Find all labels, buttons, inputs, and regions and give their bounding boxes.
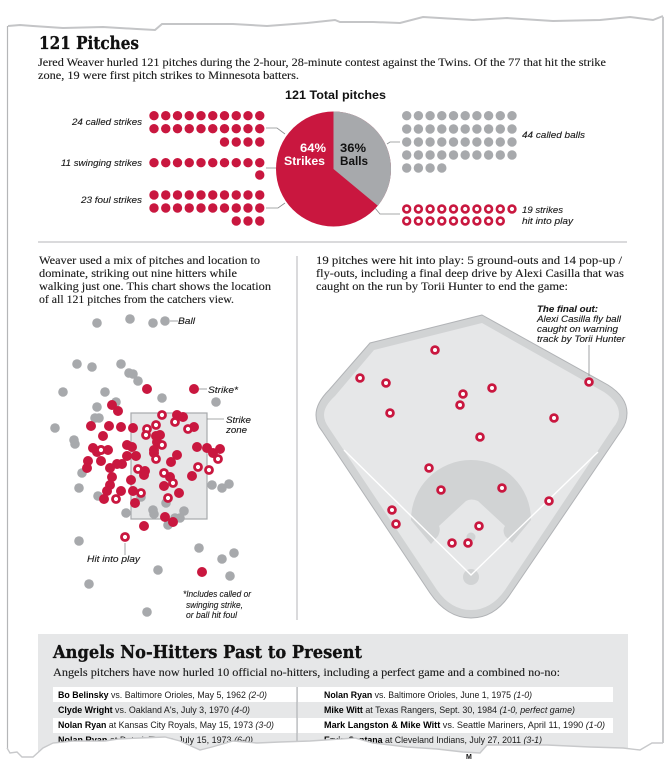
left paragraph: Weaver used a mix of pitches and location to	[39, 253, 260, 267]
no-hitter list: right column: Mike Witt at Texas Rangers, Sept. 30, 1984 (1-0, perfect game)	[324, 704, 575, 715]
strike zone box	[131, 413, 207, 519]
pitch category labels: 44 called balls	[522, 129, 585, 140]
no-hitter list: right column: Ervin Santana at Cleveland Indians, July 27, 2011 (3-1)	[324, 734, 542, 745]
scatter annotations: *Includes called or	[183, 588, 252, 599]
scatter annotations	[87, 315, 252, 620]
panel intro: Angels pitchers have now hurled 10 official no-hitters, including a perfect game and a combined no-no:	[53, 665, 560, 679]
pitch category labels: 11 swinging strikes	[61, 157, 142, 168]
baseball field	[316, 315, 627, 618]
no-hitter list: right column	[324, 689, 605, 745]
intro text	[38, 55, 606, 82]
pie chart: strikes vs balls: Balls	[340, 154, 368, 168]
final out callout	[536, 303, 626, 376]
left paragraph: walking just one. This chart shows the location	[39, 279, 271, 293]
scatter annotations: Ball	[178, 315, 196, 326]
no-hitter list: left column: Nolan Ryan at Kansas City Royals, May 15, 1973 (3-0)	[58, 719, 274, 730]
scatter annotations: Hit into play	[87, 553, 141, 564]
pitch category labels: 19 strikes	[522, 204, 563, 215]
scatter annotations: zone	[225, 424, 247, 435]
pitch category labels: hit into play	[522, 215, 574, 226]
no-hitter list: right column: Nolan Ryan vs. Baltimore Orioles, June 1, 1975 (1-0)	[324, 689, 532, 700]
title: 121 Pitches: 121 Pitches	[39, 33, 139, 54]
table rows	[53, 687, 613, 733]
dots: 11 swinging strikes	[149, 158, 264, 180]
pie connector lines	[266, 128, 400, 214]
pitch category labels: 24 called strikes	[71, 116, 142, 127]
torn fragment letter: M	[466, 754, 472, 761]
pitch category labels	[61, 116, 585, 226]
right paragraph	[316, 253, 624, 293]
scatter: balls	[50, 314, 239, 617]
scatter annotations: swinging strike,	[186, 599, 243, 610]
right paragraph: fly-outs, including a final deep drive by Alexi Casilla that was	[316, 266, 624, 280]
no-hitter list: left column	[58, 689, 274, 745]
scatter: hit into play	[98, 412, 222, 540]
no-hitter list: right column: Mark Langston & Mike Witt vs. Seattle Mariners, April 11, 1990 (1-0)	[324, 719, 605, 730]
intro text: Jered Weaver hurled 121 pitches during the 2-hour, 28-minute contest against the Twins. Of the 77 that hit the strike	[38, 55, 606, 69]
final out callout: caught on warning	[537, 323, 619, 334]
section dividers	[38, 242, 627, 620]
no-hitter list: left column: Nolan Ryan at Detroit Tigers, July 15, 1973 (6-0)	[58, 734, 253, 745]
chart heading: 121 Total pitches: 121 Total pitches	[285, 88, 386, 102]
final out callout: The final out:	[537, 303, 598, 314]
final out callout: track by Torii Hunter	[537, 333, 626, 344]
torn edge outline: top	[8, 16, 663, 30]
pitch category labels: 23 foul strikes	[80, 194, 142, 205]
field: balls hit into play	[357, 347, 592, 546]
scatter: strikes	[82, 384, 225, 577]
dots: 44 called balls	[402, 111, 517, 173]
no-hitter list: left column: Bo Belinsky vs. Baltimore Orioles, May 5, 1962 (2-0)	[58, 689, 267, 700]
left paragraph	[39, 253, 271, 306]
pie chart: strikes vs balls	[276, 111, 391, 226]
scatter annotations: Strike*	[208, 384, 238, 395]
left paragraph: of all 121 pitches from the catchers view.	[39, 292, 234, 306]
torn edge outline: bottom	[7, 737, 663, 757]
dots: 23 foul strikes	[149, 190, 264, 226]
left paragraph: dominate, striking out nine hitters while	[39, 266, 237, 280]
scatter annotations: Strike	[226, 414, 251, 425]
right paragraph: 19 pitches were hit into play: 5 ground-outs and 14 pop-up /	[316, 253, 623, 267]
panel heading: Angels No-Hitters Past to Present	[52, 642, 363, 663]
pie chart: strikes vs balls: 64%	[300, 141, 326, 155]
panel: Angels no-hitters	[38, 634, 628, 759]
rings: 19 strikes hit into play	[403, 206, 515, 224]
scatter annotations: or ball hit foul	[186, 609, 238, 620]
final out callout: Alexi Casilla fly ball	[536, 313, 622, 324]
torn edge: bottom	[0, 737, 670, 777]
pie chart: strikes vs balls: Strikes	[284, 154, 325, 168]
no-hitter list: left column: Clyde Wright vs. Oakland A's, July 3, 1970 (4-0)	[58, 704, 250, 715]
intro text: zone, 19 were first pitch strikes to Minnesota batters.	[38, 68, 299, 82]
dots: 24 called strikes	[149, 111, 264, 147]
pie chart: strikes vs balls: 36%	[340, 141, 366, 155]
right paragraph: caught on the run by Torii Hunter to end the game:	[316, 279, 568, 293]
